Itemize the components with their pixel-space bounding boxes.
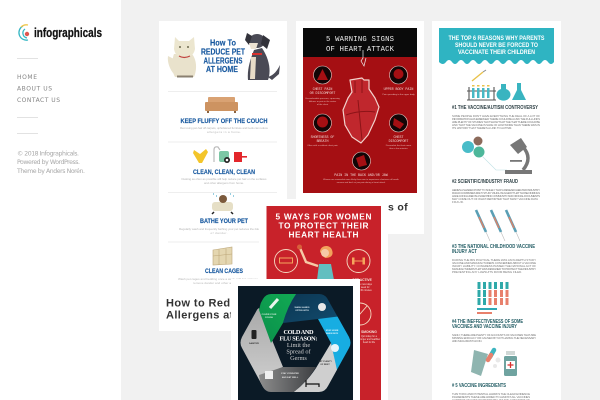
section 1 paragraph: LINK THAT THE VACCINE IS SAFE OF HOW MORE THAN THERE WAS IN	[452, 123, 540, 127]
ring labels: OFTEN WITH	[295, 310, 309, 312]
center text	[280, 329, 318, 362]
infographic: 5 warning signs of heart attack: Pain spreading to the upper body	[382, 93, 416, 96]
section 3 heading	[452, 244, 535, 255]
center text: Germs	[290, 355, 307, 362]
warning labels: BREATH	[317, 139, 328, 143]
title: how to reduce pet allergens at home	[201, 38, 246, 74]
ring labels	[249, 306, 339, 379]
section: bathe your pet: Regularly wash and frequently bathing your pet reduces the risk	[179, 227, 260, 231]
section 5 paragraph	[452, 392, 530, 400]
infographic: 5 ways for women	[266, 206, 381, 400]
ring labels: OF REST	[320, 364, 330, 366]
title: how to reduce pet allergens at home: How To	[210, 38, 236, 48]
icon: bathtub with pet	[212, 194, 234, 214]
heading	[276, 212, 372, 240]
section 1 paragraph: ARE PLENTY OF STUDIES THAT SHOW THAT THE THAT THERE COULD BE	[452, 120, 540, 124]
navigation menu	[17, 74, 60, 104]
section: keep fluffy off the couch: KEEP FLUFFY OFF THE COUCH	[180, 118, 268, 125]
footer credits	[16, 150, 85, 175]
clipped pet card caption: How to Reduce Pet	[166, 298, 272, 310]
banner: SHOULD NEVER BE FORCED TO	[455, 42, 538, 49]
side labels: SMOKING	[361, 330, 377, 334]
side labels: Exercise most days	[352, 283, 373, 286]
ring labels: WASH HANDS	[295, 306, 310, 309]
section 2 paragraph: HAVE CONCLUDED IN A SCIENTIFIC COMMUNITY AND OFFICIAL DOCUMENTS	[452, 194, 540, 198]
icon: dog	[245, 33, 280, 80]
header text: 5 WARNING SIGNS	[326, 36, 394, 44]
center text: Spread of	[286, 348, 312, 356]
header text	[326, 36, 395, 54]
heading: HEART HEALTH	[288, 230, 358, 240]
ring labels: COVER YOUR	[262, 314, 277, 316]
section 2 paragraph: FRAUD.	[452, 200, 464, 204]
icon: three syringes	[476, 210, 520, 241]
clipped card caption: s of	[388, 202, 408, 214]
section 4 heading: VACCINES AND VACCINE INJURY	[452, 324, 517, 330]
navigation menu: ABOUT US	[17, 86, 52, 92]
section: keep fluffy off the couch	[180, 97, 268, 134]
icon: pills and medicine	[471, 350, 517, 376]
title: how to reduce pet allergens at home: AT HOME	[206, 64, 238, 74]
footer credits: Powered by WordPress.	[17, 159, 80, 166]
section 1 paragraph: INFORMATION HAS EMERGED THERE COULD BE A LINK THE FULL LINKS	[452, 117, 540, 121]
logo: infographicals	[34, 26, 102, 40]
section 2 paragraph	[452, 188, 540, 204]
illustration: woman lifting weight	[297, 244, 334, 280]
warning icons	[314, 66, 408, 170]
title: how to reduce pet allergens at home: REDUCE PET	[201, 46, 246, 56]
ring labels: AND EAT WELL	[282, 376, 299, 379]
section 1 paragraph: ITS HISTORY THAT THERE'S A LINK TO AUTISM.	[452, 126, 512, 130]
section 1 paragraph	[452, 114, 540, 130]
section 3 paragraph: INJURY LIABILITY. CONGRESS PASSED THE NATIONAL ACT OF	[452, 264, 536, 268]
icon: dumbbell	[347, 250, 370, 272]
side labels	[272, 278, 380, 344]
side labels: Quit today for a	[361, 335, 378, 338]
section 4 paragraph: MISSING EFFICACY OR CAUSED BY NOT HAVING THE NECESSARY	[452, 336, 536, 340]
section 4 heading	[452, 319, 523, 330]
section 3 paragraph	[452, 258, 536, 274]
section: clean clean clean	[182, 147, 267, 185]
ring labels: STAY HYDRATED	[281, 372, 299, 375]
icon: cage	[213, 247, 232, 265]
warning labels: SHORTNESS OF	[311, 135, 334, 139]
banner	[439, 28, 554, 64]
ring labels: STAY HOME	[326, 329, 339, 332]
heart illustration	[343, 78, 379, 143]
section 5 paragraph: THIS TOXIC AND POTENTIAL HARM IS THE CLEAR EVIDENCE	[452, 392, 530, 396]
warning labels: UPPER BODY PAIN	[384, 87, 413, 91]
logo	[19, 25, 102, 40]
icon: vacuum	[214, 147, 230, 163]
icon: yellow gloves	[193, 149, 208, 163]
section 1 heading: #1 THE VACCINE/AUTISM CONTROVERSY	[452, 105, 538, 111]
section 3 paragraph: PREVENTING ANY LAWSUITS FROM BEING FILED.	[452, 270, 522, 274]
infographic: 5 warning signs of heart attack: Uncomfortable pressure, squeezing	[305, 97, 341, 100]
card: cold and flu	[230, 279, 360, 400]
infographic: 5 warning signs of heart attack: than a few minutes	[389, 147, 409, 150]
sidebar	[0, 0, 121, 400]
section 4 paragraph: ADD. MUCH MUST GO ON.	[452, 339, 482, 343]
infographic: 5 warning signs of heart attack: fullness or pain in the center	[309, 100, 336, 103]
section 3 heading: INJURY ACT	[452, 249, 477, 255]
infographic: 5 warning signs of heart attack: Often with or without chest pain	[307, 144, 339, 147]
warning labels: CHEST	[394, 135, 403, 139]
section 3 heading: #3 THE NATIONAL CHILDHOOD VACCINE	[452, 244, 535, 250]
icon: no smoking	[349, 303, 371, 325]
heading: 5 WAYS FOR WOMEN	[276, 212, 372, 222]
icon: cells and microscope	[462, 136, 532, 174]
section 1 paragraph: SOME PEOPLE DON'T HAVE EVERYTHING THE DEAL OF A LOT OF	[452, 114, 540, 118]
section: keep fluffy off the couch: Removing pet-hair off carpets, upholstered furniture and beds can reduce	[180, 126, 268, 130]
title: how to reduce pet allergens at home: ALLERGENS	[204, 56, 243, 66]
center text: FLU SEASON:	[280, 336, 318, 342]
infographic: 5 warning signs of heart attack: Women are somewhat more likely than men to experience shortness of breath	[323, 178, 400, 181]
navigation menu: CONTACT US	[17, 97, 60, 104]
section 2 paragraph: HERE'S A SHARED POINT TO SOLELY THAT A RESEARCHER AND INDUSTRY	[452, 188, 540, 192]
card: women heart health	[259, 199, 408, 400]
section: bathe your pet	[179, 194, 260, 235]
warning labels: PAIN IN THE BACK AND/OR JAW	[334, 173, 388, 177]
icon: test tubes and flasks	[467, 70, 526, 101]
section 3 paragraph: VACCINE AND MANUFACTURERS CONCERNED ABOUT A VACCINE	[452, 261, 536, 265]
warning labels: OR DISCOMFORT	[310, 91, 335, 95]
side labels: stronger and healthier	[358, 338, 380, 341]
section: keep fluffy off the couch: allergens in a home.	[207, 130, 241, 134]
section 2 paragraph: FRAUD COMPANIES MANY STUDY WHICH SUGGEST THAT THOSE FINDINGS	[452, 191, 540, 195]
icon: cat	[168, 37, 196, 78]
side labels: of the week for	[354, 286, 370, 289]
icon: red dustpan	[234, 152, 247, 162]
icon: sleep bed	[274, 250, 298, 272]
section 2 heading: #2 SCIENTIFIC/INDUSTRY FRAUD	[452, 179, 518, 185]
banner: THE TOP 6 REASONS WHY PARENTS	[448, 35, 544, 42]
card: heart attack	[296, 21, 424, 234]
section: clean clean clean: and other allergens from home.	[204, 181, 244, 185]
chart: people grid	[477, 282, 508, 314]
section 3 paragraph: MANUFACTURERS THAT WAS DESIGNED TO PROTECT THE INDUSTRY	[452, 267, 536, 271]
warning labels: CHEST PAIN	[313, 87, 332, 91]
icon: pulse line	[361, 50, 366, 66]
hexagon ring	[240, 294, 350, 392]
infographic: 5 warning signs of heart attack: nausea and back or jaw pain during a heart attack	[337, 181, 386, 184]
section 4 heading: #4 THE INEFFECTIVENESS OF SOME	[452, 319, 523, 325]
header text: OF HEART ATTACK	[326, 46, 395, 54]
warning labels	[310, 87, 413, 177]
side labels: GET ACTIVE	[352, 278, 373, 282]
section 4 paragraph	[452, 333, 536, 343]
card: vaccines	[432, 21, 561, 400]
heading: TO PROTECT THEIR	[278, 220, 368, 230]
infographic: 5 warning signs of heart attack: of the chest	[317, 103, 329, 106]
card: pet allergens	[159, 21, 287, 331]
section 5 paragraph: INGREDIENTS THESE ARE ADDED TO ALMOST ALL VACCINES	[452, 395, 530, 399]
navigation menu: HOME	[17, 74, 37, 81]
section 4 paragraph: SADLY, THERE ARE PLENTY OF ACCOUNTS OF VACCINES THAT ARE	[452, 333, 536, 337]
section: bathe your pet: BATHE YOUR PET	[200, 218, 248, 225]
section 5 heading: # 5 VACCINE INGREDIENTS	[452, 383, 506, 389]
section: clean cages: Wash pet cages and bedding once a week with hot water to	[178, 277, 258, 281]
clipped pet card caption	[166, 298, 272, 322]
section: clean cages: remove dander and other allergens.	[193, 281, 243, 285]
center text: Limit the	[287, 342, 310, 349]
ring icons	[252, 299, 339, 387]
section 2 paragraph: MAY COME OUT OF WHAT REPORTED THAT MANY VACCINE DATA	[452, 197, 538, 201]
banner: VACCINATE THEIR CHILDREN	[458, 49, 535, 56]
section: bathe your pet: of dander.	[210, 231, 228, 235]
grey content background	[121, 0, 600, 400]
ring labels: GET PLENTY	[318, 361, 332, 363]
section 3 paragraph: DURING THE 80S POLITICAL THERE WAS AN IN-DEPTH STUDY	[452, 258, 536, 262]
warning labels: DISCOMFORT	[389, 139, 408, 143]
ring labels: COUGH	[265, 317, 273, 319]
infographic: cold and flu season	[230, 286, 356, 400]
center text: COLD AND	[284, 329, 314, 336]
infographic: 5 warning signs of heart attack: Discomfort that lasts more	[386, 144, 412, 147]
ring labels: SANITIZE	[249, 342, 260, 345]
side labels: heart for life	[363, 341, 376, 344]
section: clean cages: CLEAN CAGES	[205, 268, 244, 275]
section: clean cages	[178, 247, 258, 285]
icon: couch	[205, 97, 238, 113]
side labels: GET MORE SLEEP	[272, 279, 302, 283]
section: clean clean clean: Dusting as often as possible will help reduce pet hair on the surfaces	[182, 177, 267, 181]
side labels: at least 30 minutes	[352, 289, 372, 292]
section: clean clean clean: CLEAN, CLEAN, CLEAN	[193, 169, 255, 176]
footer credits: Theme by Anders Norén.	[16, 167, 85, 175]
infographic: 5 warning signs of heart attack	[303, 28, 417, 193]
footer credits: © 2018 Infographicals.	[17, 150, 79, 158]
ring labels: WHEN SICK	[326, 333, 339, 335]
clipped pet card caption: Allergens at Home	[166, 310, 269, 322]
